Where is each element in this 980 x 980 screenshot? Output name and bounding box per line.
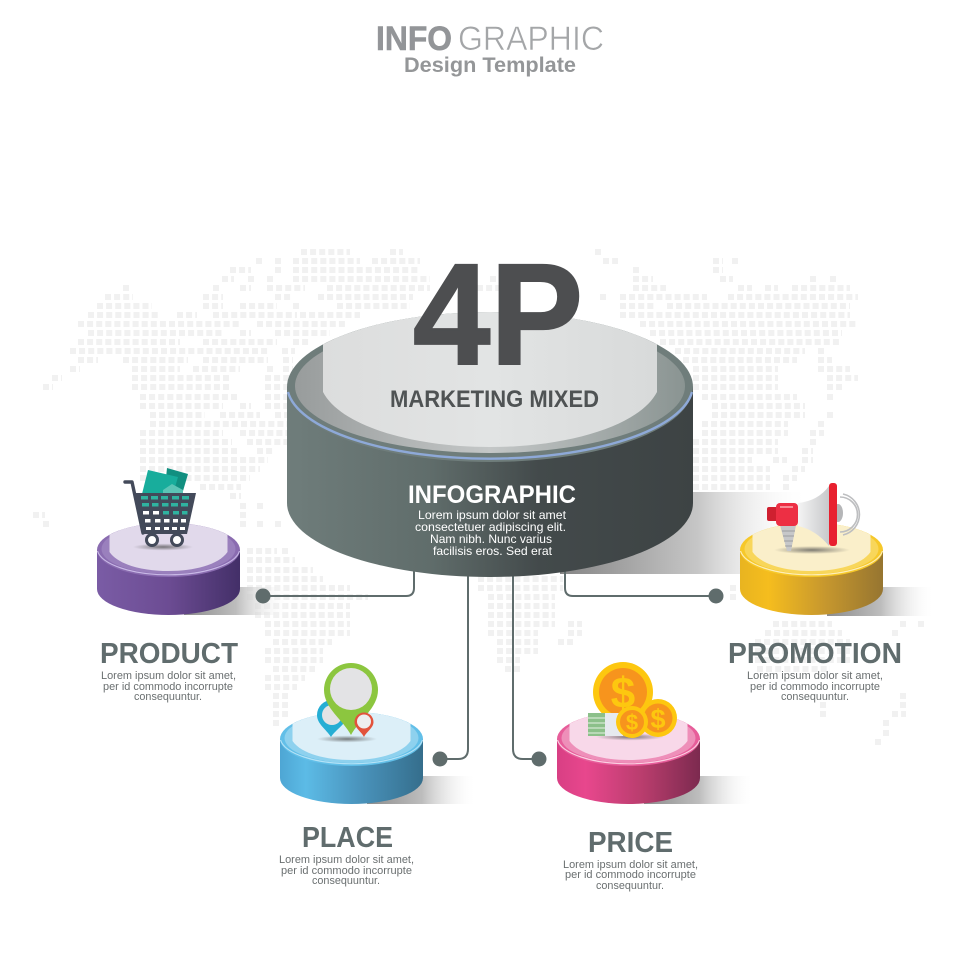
- icon: location pins: [317, 663, 378, 742]
- disc: promotion: [740, 523, 883, 615]
- main cylinder body text: Nam nibh. Nunc varius: [430, 532, 552, 546]
- shadow: place disc: [367, 776, 477, 804]
- icon: coins and cash: [588, 662, 677, 740]
- label: price: PRICE: [588, 827, 673, 859]
- label: product: consequuntur.: [134, 691, 202, 703]
- label: price: per id commodo incorrupte: [565, 869, 696, 881]
- title: GRAPHIC: [458, 20, 604, 58]
- main cylinder body text: Lorem ipsum dolor sit amet: [418, 508, 567, 522]
- shadow: price disc: [644, 776, 754, 804]
- icon: megaphone: [767, 483, 859, 554]
- disc: price: [557, 712, 700, 804]
- shadow: product disc: [184, 587, 288, 615]
- shadow: promotion disc: [827, 587, 935, 616]
- title: [376, 20, 604, 77]
- title: Design Template: [404, 54, 576, 77]
- label: promotion: per id commodo incorrupte: [750, 681, 880, 693]
- icon: coins and cash: $: [611, 669, 635, 718]
- main cylinder body text: facilisis eros. Sed erat: [433, 544, 553, 558]
- title: INFO: [376, 20, 452, 58]
- label: price: consequuntur.: [596, 880, 664, 892]
- label: promotion: Lorem ipsum dolor sit amet,: [747, 670, 883, 682]
- label: promotion: consequuntur.: [781, 691, 849, 703]
- icon: shopping cart: [125, 468, 196, 550]
- disc: place: [280, 712, 423, 804]
- label: place: Lorem ipsum dolor sit amet,: [279, 854, 414, 866]
- main cylinder: [287, 312, 693, 577]
- label: place: PLACE: [302, 822, 393, 854]
- label: price: Lorem ipsum dolor sit amet,: [563, 859, 698, 871]
- label: product: [100, 638, 238, 703]
- heading: 4P: 4P: [413, 234, 583, 395]
- dotted world map background: [33, 252, 924, 742]
- connector: place: [432, 565, 468, 766]
- label: product: Lorem ipsum dolor sit amet,: [101, 670, 236, 682]
- connector: price: [513, 565, 546, 766]
- label: place: [279, 822, 414, 887]
- label: promotion: [728, 638, 902, 703]
- connector: promotion: [565, 565, 724, 604]
- connector: product: [256, 565, 414, 604]
- icon: coins and cash: $: [650, 704, 666, 734]
- heading: marketing mixed: MARKETING MIXED: [390, 386, 599, 413]
- main cylinder body text: consectetuer adipiscing elit.: [415, 520, 566, 534]
- main cylinder shadow: [560, 492, 810, 574]
- disc: product: [97, 523, 240, 615]
- label: promotion: PROMOTION: [728, 638, 902, 670]
- main cylinder body text: [415, 508, 567, 558]
- label: place: per id commodo incorrupte: [281, 865, 412, 877]
- label: place: consequuntur.: [312, 875, 380, 887]
- label: product: per id commodo incorrupte: [103, 681, 233, 693]
- icon: coins and cash: $: [626, 710, 638, 735]
- label: price: [563, 827, 698, 892]
- label: product: PRODUCT: [100, 638, 238, 670]
- heading: infographic: INFOGRAPHIC: [408, 481, 576, 509]
